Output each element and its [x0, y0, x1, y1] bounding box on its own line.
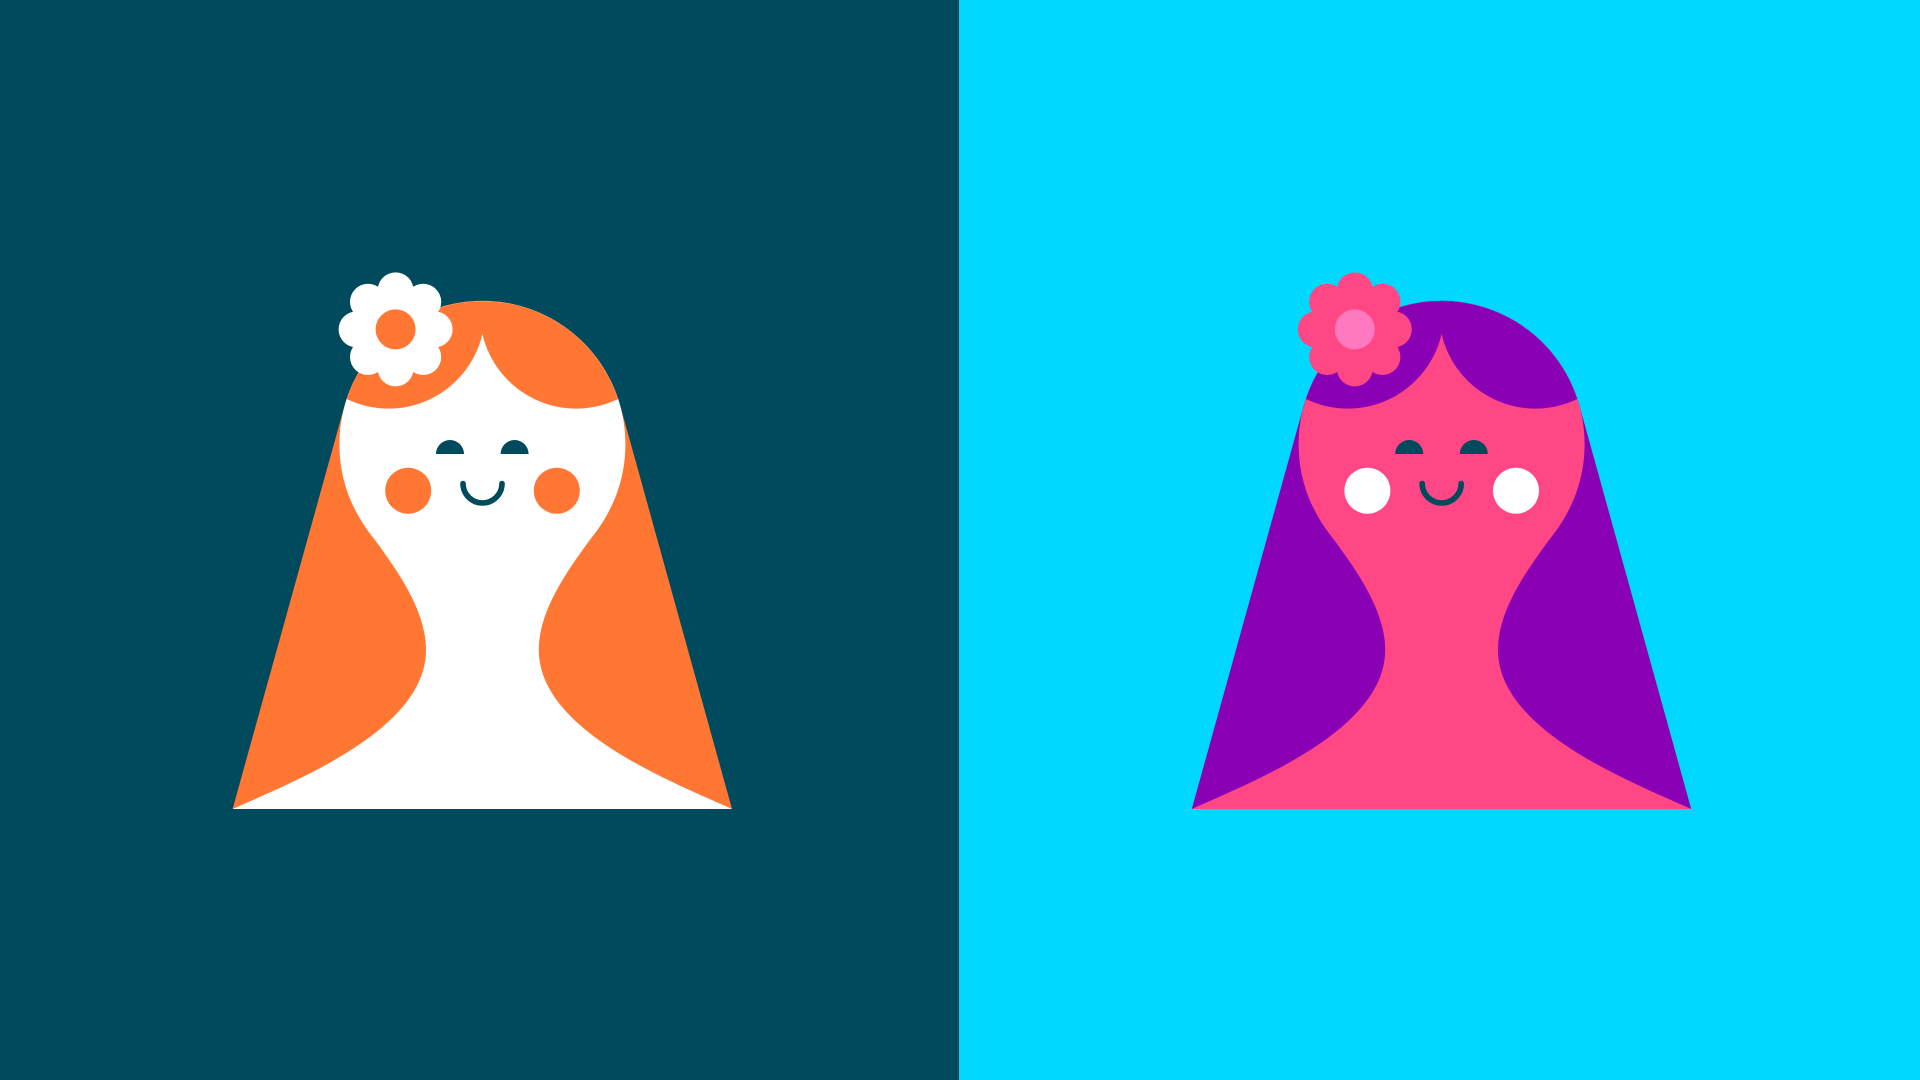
left eye	[436, 440, 464, 454]
hair silhouette	[233, 301, 732, 809]
left cheek	[385, 468, 431, 514]
smile	[463, 484, 502, 503]
hair silhouette	[1192, 301, 1691, 809]
flower petals	[339, 272, 453, 386]
panel: dark teal left background	[0, 0, 959, 1080]
right cheek	[1493, 468, 1539, 514]
character: purple and pink girl	[1192, 272, 1691, 809]
flower centre	[1335, 309, 1375, 349]
hair fringe	[1306, 301, 1577, 409]
icon: pink flower	[1298, 272, 1412, 386]
flower centre	[376, 309, 416, 349]
left cheek	[1344, 468, 1390, 514]
face and body	[1192, 301, 1691, 809]
smile	[1422, 484, 1461, 503]
right cheek	[534, 468, 580, 514]
character: orange and white girl	[233, 272, 732, 809]
right eye	[1460, 440, 1488, 454]
left eye	[1395, 440, 1423, 454]
icon: white flower	[339, 272, 453, 386]
right eye	[501, 440, 529, 454]
panel: cyan right background	[959, 0, 1920, 1080]
face and body	[233, 301, 732, 809]
flower petals	[1298, 272, 1412, 386]
hair fringe	[347, 301, 618, 409]
